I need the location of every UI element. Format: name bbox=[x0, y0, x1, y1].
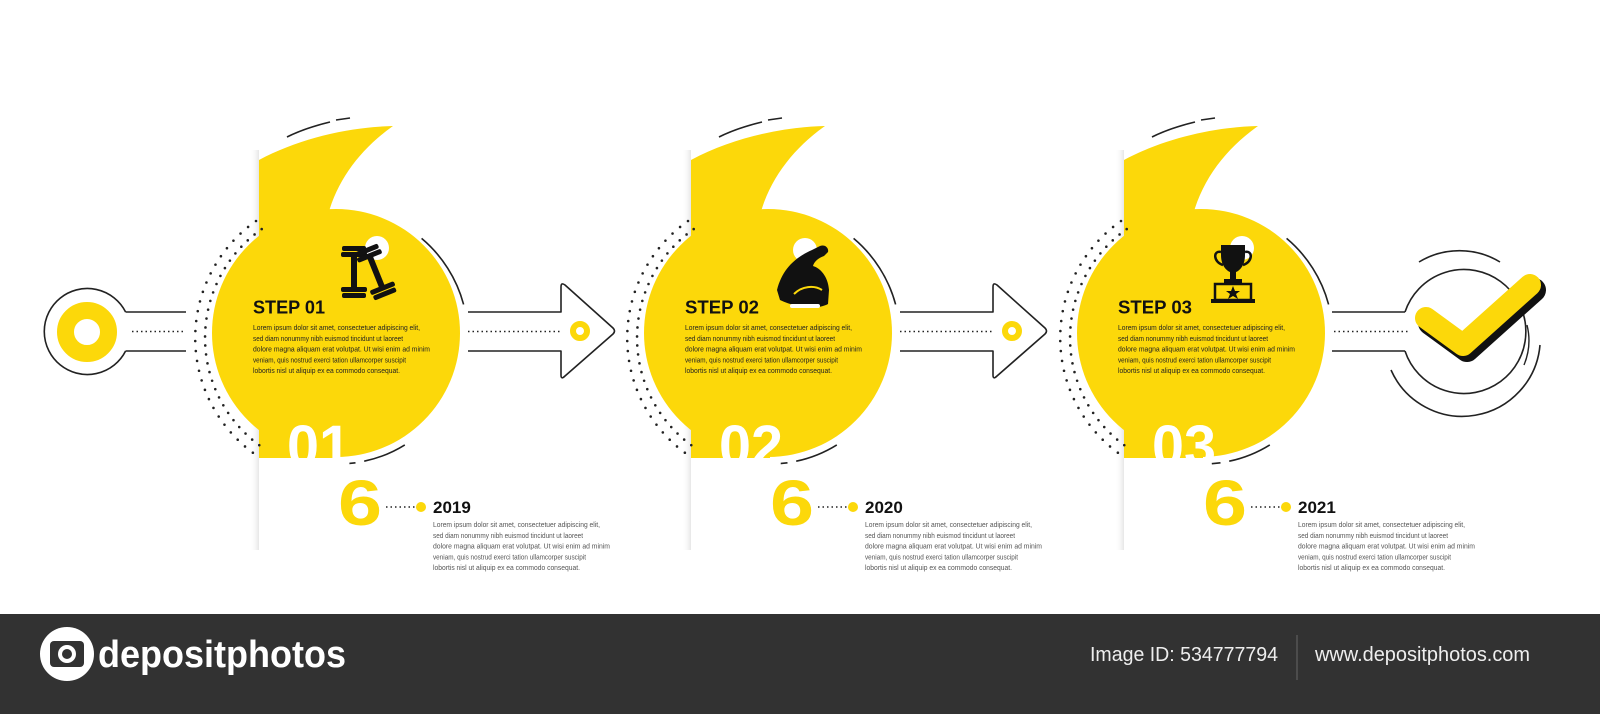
year block: 2020 bbox=[770, 467, 1042, 572]
website url: www.depositphotos.com bbox=[1314, 644, 1530, 666]
arrow 1 bbox=[468, 284, 614, 378]
icon: dumbbells bbox=[341, 236, 398, 301]
icon: flexed biceps bbox=[777, 238, 829, 308]
year block: 2020: 2020 bbox=[865, 498, 903, 517]
end node: check mark bbox=[1332, 251, 1540, 416]
year block: 2019: 2019 bbox=[433, 498, 471, 517]
footer bar bbox=[0, 614, 1600, 714]
year block: 2021 bbox=[1203, 467, 1475, 572]
heading: STEP 02: STEP 02 bbox=[685, 298, 759, 318]
year block: 2020: 6 bbox=[770, 467, 814, 539]
image id: Image ID: 534777794 bbox=[1090, 644, 1278, 666]
year block: 2021: 6 bbox=[1203, 467, 1247, 539]
big number 01: 01 bbox=[287, 414, 351, 479]
heading: STEP 01: STEP 01 bbox=[253, 298, 325, 318]
arrow 2 bbox=[900, 284, 1046, 378]
panel: step 03 bbox=[1060, 118, 1329, 550]
year block: 2019: 6 bbox=[338, 467, 382, 539]
text block: step 01 body bbox=[253, 325, 430, 375]
year block: 2019 bbox=[338, 467, 610, 572]
year block: 2021: 2021 bbox=[1298, 498, 1336, 517]
panel: step 01 bbox=[195, 118, 464, 550]
heading: STEP 03: STEP 03 bbox=[1118, 298, 1192, 318]
logo text: depositphotos bbox=[98, 634, 346, 676]
panel: step 02 bbox=[627, 118, 896, 550]
text block: step 03 body bbox=[1118, 325, 1295, 375]
start node bbox=[44, 288, 186, 374]
icon: trophy bbox=[1211, 236, 1255, 303]
big number 03: 03 bbox=[1152, 414, 1216, 479]
text block: step 02 body bbox=[685, 325, 862, 375]
icon: camera logo bbox=[40, 627, 94, 681]
icon: check mark bbox=[1426, 285, 1534, 350]
big number 02: 02 bbox=[719, 414, 783, 479]
